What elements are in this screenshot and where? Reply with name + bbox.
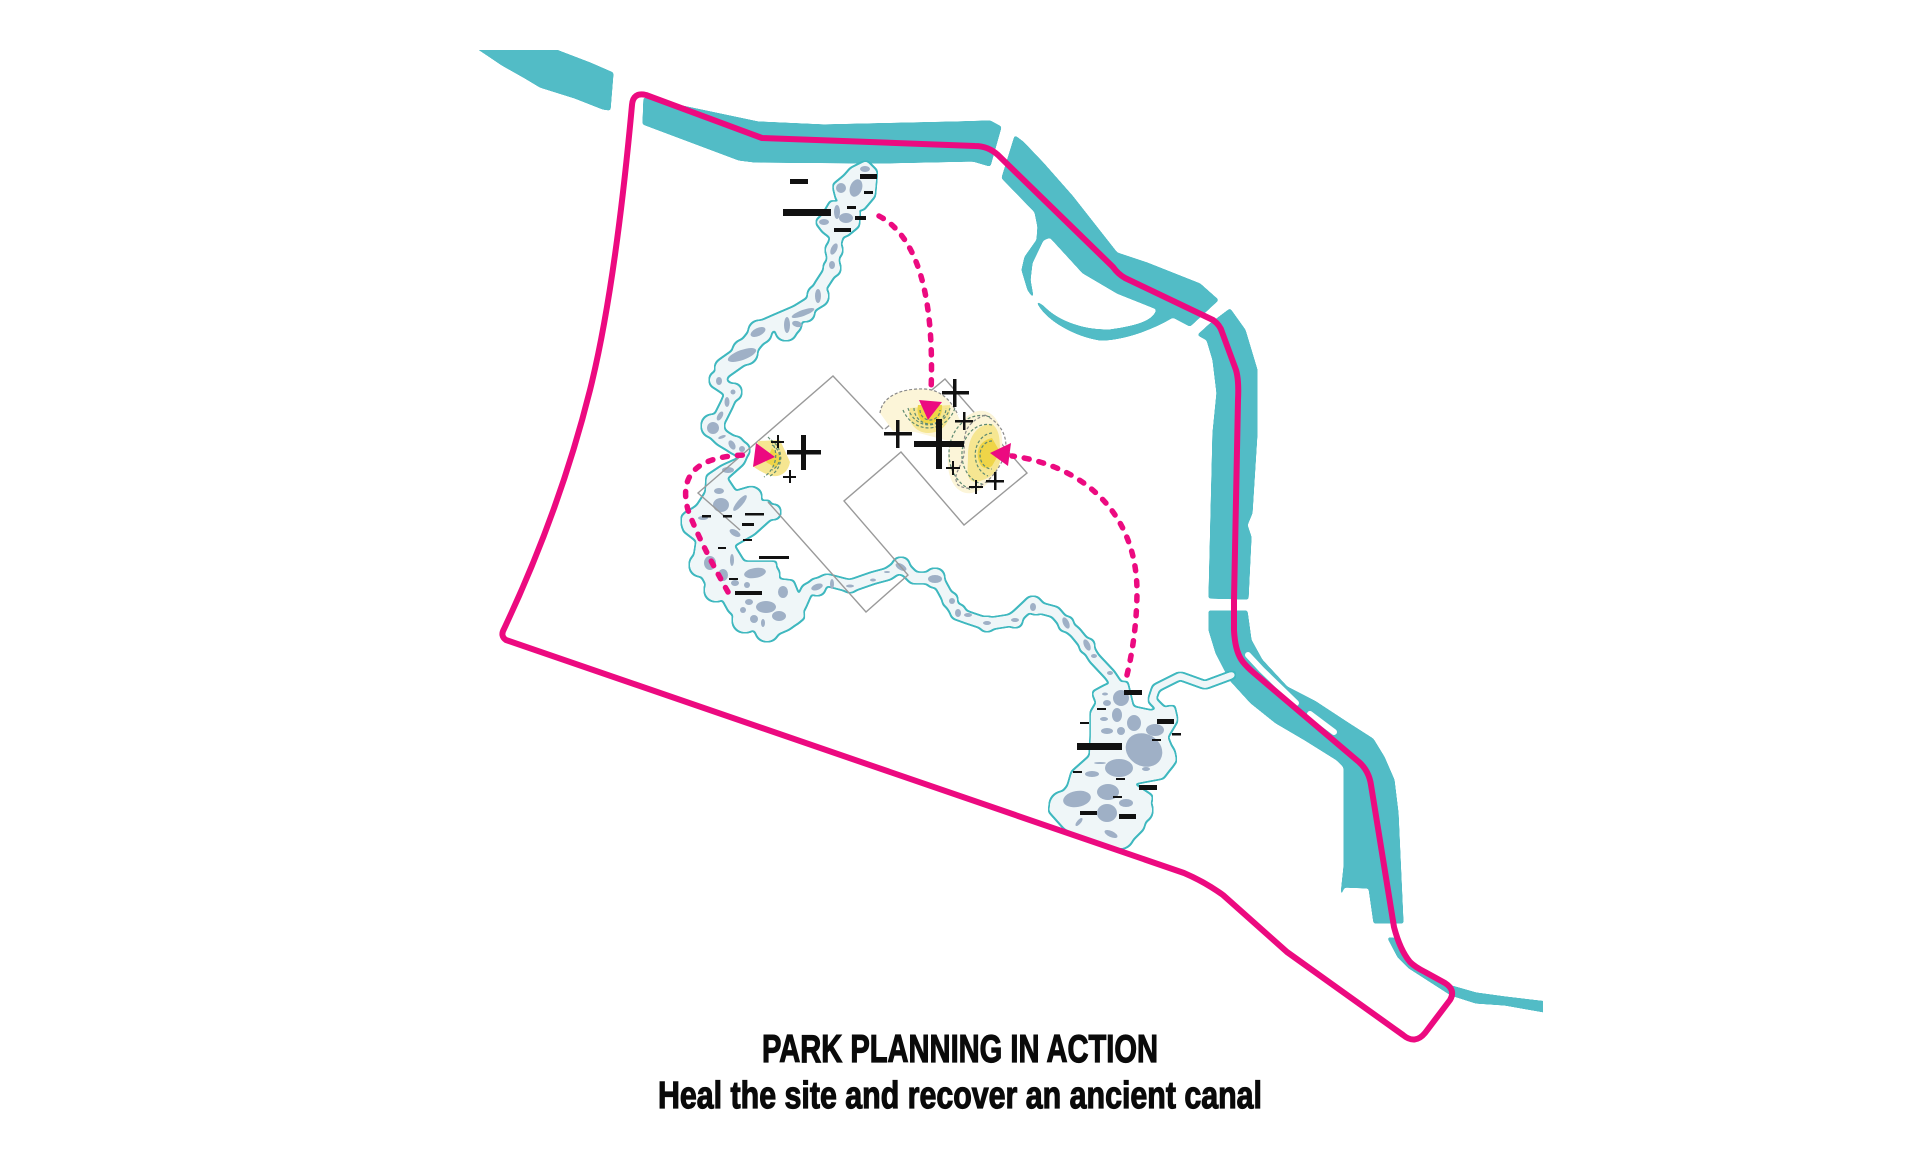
ponds: south-west cluster	[698, 467, 788, 627]
park boundary line	[502, 94, 1452, 1040]
canal: river and canal water bodies	[465, 40, 1556, 1014]
canal segment: southern outflow	[1388, 938, 1556, 1014]
south-west wetland cluster	[683, 457, 803, 637]
hotspot: east building	[940, 405, 1010, 499]
stream to canal	[1152, 675, 1232, 716]
minus symbols: degraded areas	[702, 174, 1181, 819]
corridor from north cluster	[712, 232, 1232, 716]
hotspot: west building	[753, 437, 790, 477]
south-west cluster lobes	[682, 488, 803, 641]
north wetland cluster	[835, 163, 875, 208]
ponds: south-east cluster	[1062, 690, 1168, 840]
ponds: east corridor	[810, 561, 1113, 675]
south-east cluster lobes	[1050, 711, 1175, 848]
oxbow lagoon arc	[1037, 302, 1173, 340]
title line two: Heal the site and recover an ancient canal	[658, 1075, 1262, 1117]
south-east wetland cluster	[1050, 683, 1176, 847]
corridor bumps	[702, 242, 1094, 653]
title	[658, 1028, 1262, 1117]
arrow: north wetland to north building	[879, 216, 942, 420]
soil remediation hotspots	[753, 389, 1010, 499]
wetland corridor silhouette	[682, 163, 1232, 848]
canal islands	[1248, 655, 1334, 732]
canal segment: eastern reach	[1198, 309, 1257, 599]
title line one: PARK PLANNING IN ACTION	[762, 1028, 1158, 1071]
hotspot: north building	[880, 389, 975, 445]
arrow: south-east wetland to east building	[990, 443, 1137, 675]
canal segment: south-east reach	[1209, 611, 1403, 923]
site plan diagram	[479, 50, 1543, 1110]
arrow: south-west wetland to west building	[686, 443, 775, 592]
canal segment: north-east reach	[1002, 136, 1218, 326]
building footprint outline	[698, 376, 1027, 612]
wetland ponds	[698, 166, 1168, 840]
canal segment: north-west reach	[465, 40, 613, 110]
canal segment: northern reach	[643, 98, 1001, 166]
ponds: north cluster	[707, 166, 870, 452]
east corridor	[800, 565, 1030, 624]
plus symbols: improved areas	[771, 379, 1004, 494]
